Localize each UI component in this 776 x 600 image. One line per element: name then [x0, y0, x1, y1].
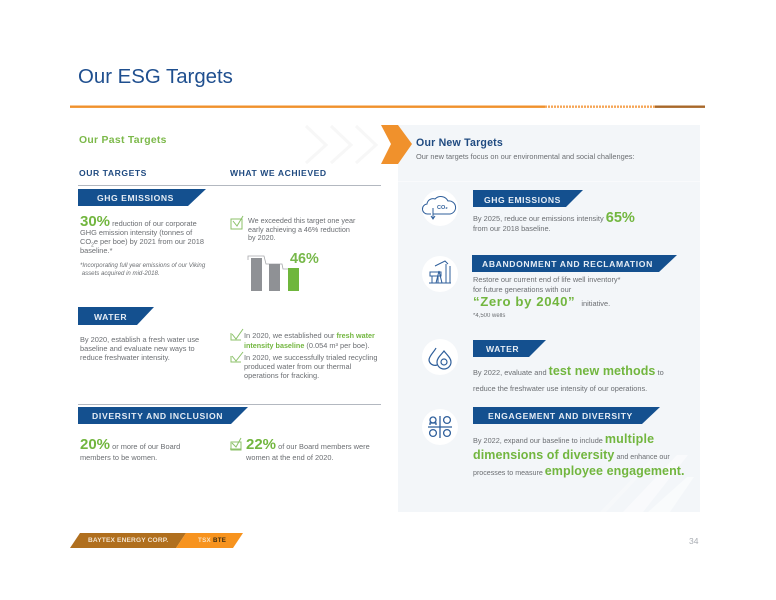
new targets subtitle: Our new targets focus on our environmental and social challenges: [416, 152, 635, 161]
new abandonment text: Restore our current end of life well inventory* [473, 275, 620, 284]
banner label: ghg new: GHG EMISSIONS [484, 195, 561, 205]
past ghg text: CO2e per boe) by 2021 from our 2018 [80, 237, 204, 248]
new engagement text: processes to measure employee engagement. [473, 464, 685, 478]
new abandonment text [473, 275, 620, 294]
heading: our targets: OUR TARGETS [79, 168, 147, 178]
new ghg text [473, 210, 635, 233]
banner label: abandonment: ABANDONMENT AND RECLAMATION [482, 259, 653, 269]
achieved diversity text [246, 436, 370, 462]
achieved ghg text: We exceeded this target one year [248, 216, 355, 225]
icon: co2 cloud: CO₂ [437, 205, 448, 211]
new abandonment text: for future generations with our [473, 284, 571, 294]
zero by 2040: “Zero by 2040” initiative. [473, 294, 610, 309]
achieved ghg text [248, 216, 356, 242]
past diversity text [80, 436, 180, 462]
achieved ghg text: early achieving a 46% reduction [248, 225, 350, 234]
heading: what we achieved: WHAT WE ACHIEVED [230, 168, 327, 178]
heading: our past targets: Our Past Targets [79, 135, 167, 146]
abandonment footnote: *4,500 wells [473, 313, 505, 319]
past ghg text: 30% reduction of our corporate [80, 213, 197, 230]
past ghg footnote [80, 262, 206, 277]
heading: our new targets: Our New Targets [416, 137, 503, 149]
new ghg text: By 2025, reduce our emissions intensity 65% [473, 210, 635, 226]
bar chart: 46 percent reduction: 46% [290, 251, 319, 267]
past ghg footnote: *Incorporating full year emissions of our Viking [80, 262, 205, 269]
new water text: By 2022, evaluate and test new methods to [473, 364, 664, 378]
new engagement text: By 2022, expand our baseline to include multiple [473, 432, 654, 446]
past ghg text: GHG emission intensity (tonnes of [80, 228, 192, 237]
past diversity text: members to be women. [80, 452, 157, 462]
achieved water text two: operations for fracking. [244, 371, 319, 380]
banner label: diversity: DIVERSITY AND INCLUSION [92, 411, 223, 421]
panel: new targets background [398, 125, 700, 512]
past diversity text: 20% or more of our Board [80, 436, 180, 453]
footer company name: BAYTEX ENERGY CORP. [88, 537, 168, 544]
banner label: engagement: ENGAGEMENT AND DIVERSITY [488, 411, 633, 421]
achieved diversity text: 22% of our Board members were [246, 436, 370, 453]
past water text [80, 335, 199, 362]
achieved water text one [244, 331, 375, 350]
past water text: By 2020, establish a fresh water use [80, 335, 199, 344]
achieved water text one: In 2020, we established our fresh water [244, 331, 375, 340]
achieved ghg text: by 2020. [248, 233, 276, 242]
banner label: water past: WATER [94, 312, 127, 322]
past ghg footnote: assets acquired in mid-2018. [82, 270, 160, 277]
new water text line two: reduce the freshwater use intensity of our operations. [473, 384, 647, 393]
achieved diversity text: women at the end of 2020. [246, 452, 334, 462]
past water text: baseline and evaluate new ways to [80, 344, 195, 353]
past water text: reduce freshwater intensity. [80, 353, 170, 362]
past ghg text [80, 213, 204, 255]
new engagement text [473, 432, 685, 478]
banner label: ghg emissions past: GHG EMISSIONS [97, 193, 174, 203]
banner label: water new: WATER [486, 344, 519, 354]
page number: 34 [689, 536, 698, 546]
achieved water text two: produced water from our thermal [244, 362, 351, 371]
new ghg text: from our 2018 baseline. [473, 224, 551, 233]
title: Our ESG Targets [78, 66, 233, 88]
achieved water text two [244, 353, 378, 380]
footer ticker: TSX BTE [198, 537, 226, 544]
achieved water text two: In 2020, we successfully trialed recycling [244, 353, 378, 362]
achieved water text one: intensity baseline (0.054 m³ per boe). [244, 340, 370, 350]
new engagement text: dimensions of diversity and enhance our [473, 448, 670, 462]
past ghg text: baseline.* [80, 246, 112, 255]
